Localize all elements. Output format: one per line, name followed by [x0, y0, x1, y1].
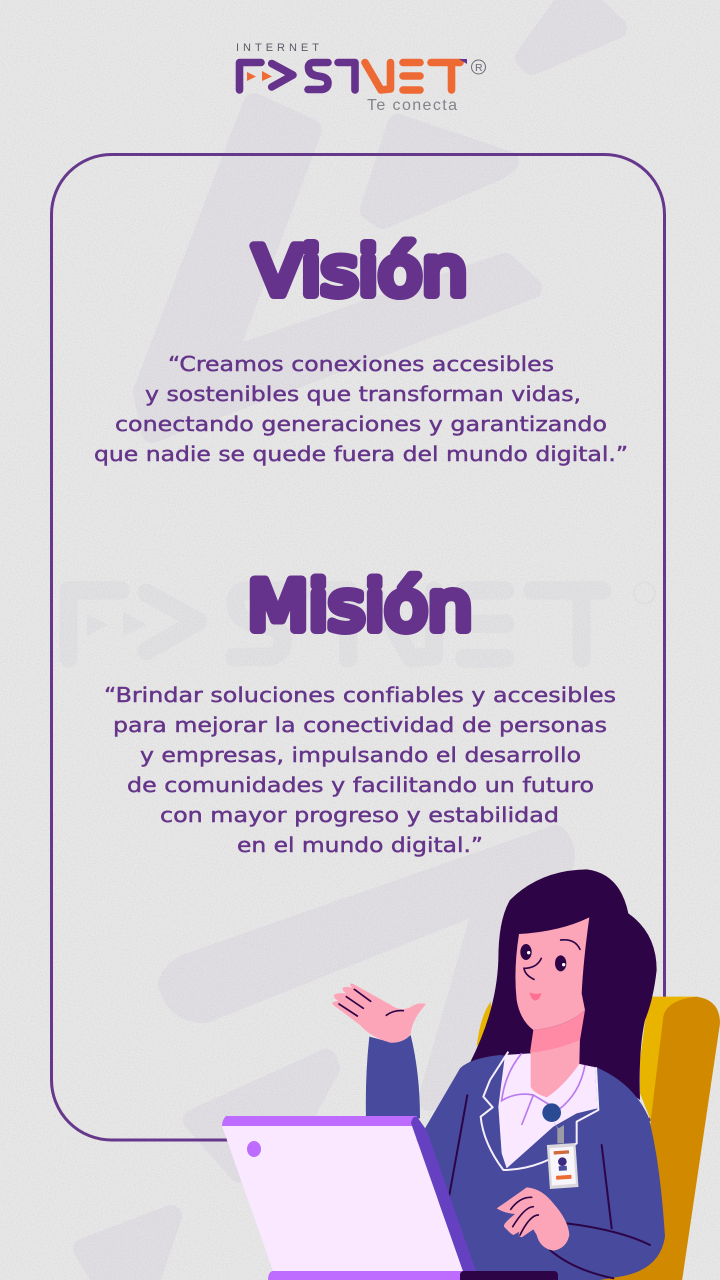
- laptop dark base: [460, 1271, 558, 1280]
- laptop base: [268, 1271, 463, 1280]
- badge reel: [542, 1103, 561, 1122]
- illustration: woman at laptop: [222, 869, 720, 1280]
- text block: vision statement: y sostenibles que transforman vidas,: [145, 382, 581, 406]
- text block: mission statement: [104, 683, 616, 857]
- badge clip: [553, 1122, 564, 1143]
- text block: mission statement: “Brindar soluciones confiables y accesibles: [104, 683, 616, 707]
- lower hand lines: [511, 1197, 538, 1235]
- text block: mission statement: en el mundo digital.”: [237, 833, 483, 857]
- text block: vision statement: conectando generaciones y garantizando: [115, 412, 607, 436]
- text block: mission statement: y empresas, impulsando el desarrollo: [140, 743, 581, 767]
- hair: [470, 869, 657, 1100]
- logo play arrows: [247, 71, 272, 81]
- rounded content frame: [52, 154, 664, 1140]
- text block: vision statement: [94, 352, 628, 466]
- text block: mission statement: para mejorar la conectividad de personas: [113, 713, 607, 737]
- logo wordmark: purple part: [240, 62, 355, 90]
- neck shadow: [530, 1010, 585, 1053]
- jacket lapels: [481, 1052, 598, 1170]
- laptop top edge: [222, 1116, 417, 1126]
- jacket: [425, 1055, 665, 1280]
- watermark letters: [69, 590, 602, 658]
- logo label: INTERNET: INTERNET: [236, 42, 319, 54]
- laptop screen: [222, 1126, 463, 1271]
- chair and character: [332, 869, 720, 1280]
- blouse: [498, 1053, 597, 1168]
- eye highlights: [527, 951, 565, 966]
- chair: orange side: [590, 997, 720, 1280]
- heading: Visión: Visión: [254, 232, 468, 310]
- background watermark shapes: [84, 0, 616, 1280]
- logo: Internet Fastnet: [236, 42, 486, 114]
- raised arm sleeve: [366, 1035, 420, 1118]
- logo wordmark: orange part: [365, 62, 460, 90]
- lower hand: [497, 1187, 569, 1251]
- id badge: [547, 1143, 578, 1189]
- laptop: [222, 1116, 558, 1280]
- background watermark wordmark: [69, 582, 655, 658]
- laptop camera dot: [247, 1141, 261, 1157]
- registered mark: [472, 60, 486, 74]
- face: [515, 917, 589, 1030]
- registered mark: R: [475, 62, 483, 74]
- nose and eyebrow: [524, 940, 580, 979]
- text block: vision statement: “Creamos conexiones accesibles: [168, 352, 554, 376]
- watermark registered circle: [634, 582, 655, 604]
- text block: vision statement: que nadie se quede fuera del mundo digital.”: [94, 442, 628, 466]
- chair: yellow back: [477, 997, 697, 1228]
- eyes: [520, 944, 566, 971]
- logo notch: [459, 59, 467, 64]
- lanyard: [502, 1053, 585, 1125]
- raised hand lines: [339, 989, 403, 1016]
- mouth: [530, 992, 541, 1001]
- laptop side: [411, 1117, 476, 1271]
- heading: Misión: Misión: [248, 568, 472, 646]
- text block: mission statement: con mayor progreso y estabilidad: [160, 803, 559, 827]
- logo tagline: Te conecta: [367, 97, 457, 114]
- jacket seams: [449, 1095, 650, 1278]
- raised hand: [332, 984, 426, 1043]
- neck: [531, 1037, 580, 1097]
- text block: mission statement: de comunidades y facilitando un futuro: [127, 773, 594, 797]
